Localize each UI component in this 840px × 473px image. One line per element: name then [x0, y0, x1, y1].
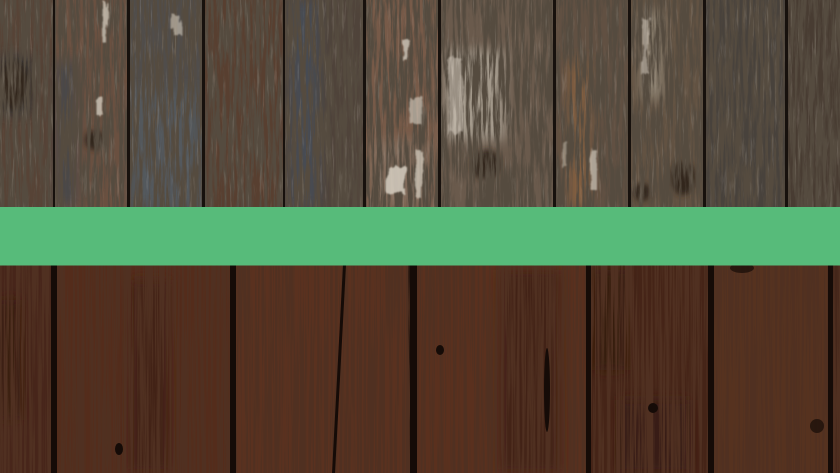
- plank 1: [0, 0, 53, 207]
- plank 2: [55, 0, 127, 207]
- knots: [0, 59, 696, 201]
- plank gaps: [53, 0, 788, 207]
- plank 4: [417, 265, 586, 473]
- plank 3: [130, 0, 202, 207]
- grain texture: [0, 265, 840, 473]
- plank 3: [236, 265, 408, 473]
- plank 10: [706, 0, 785, 207]
- plank 7: [833, 265, 840, 473]
- plank 5: [285, 0, 363, 207]
- panel: weathered wood planks (top): [0, 0, 840, 207]
- darker wood patches: [0, 270, 690, 473]
- plank 6: [714, 265, 828, 473]
- plank gaps and cracks: [51, 263, 833, 473]
- light weathered grain: [0, 0, 840, 207]
- grain texture: [0, 0, 840, 207]
- plank 5: [591, 265, 708, 473]
- plank 4: [205, 0, 283, 207]
- plank 1: [0, 265, 51, 473]
- plank 7: [441, 0, 553, 207]
- plank 11: [788, 0, 840, 207]
- plank 9: [631, 0, 703, 207]
- plank 2: [57, 265, 230, 473]
- green band: [0, 207, 840, 266]
- plank 6: [366, 0, 438, 207]
- paint flecks: [97, 2, 649, 198]
- plank 8: [556, 0, 628, 207]
- panel: dark brown wood planks (bottom): [0, 263, 840, 473]
- weathered colour patches: [0, 0, 665, 207]
